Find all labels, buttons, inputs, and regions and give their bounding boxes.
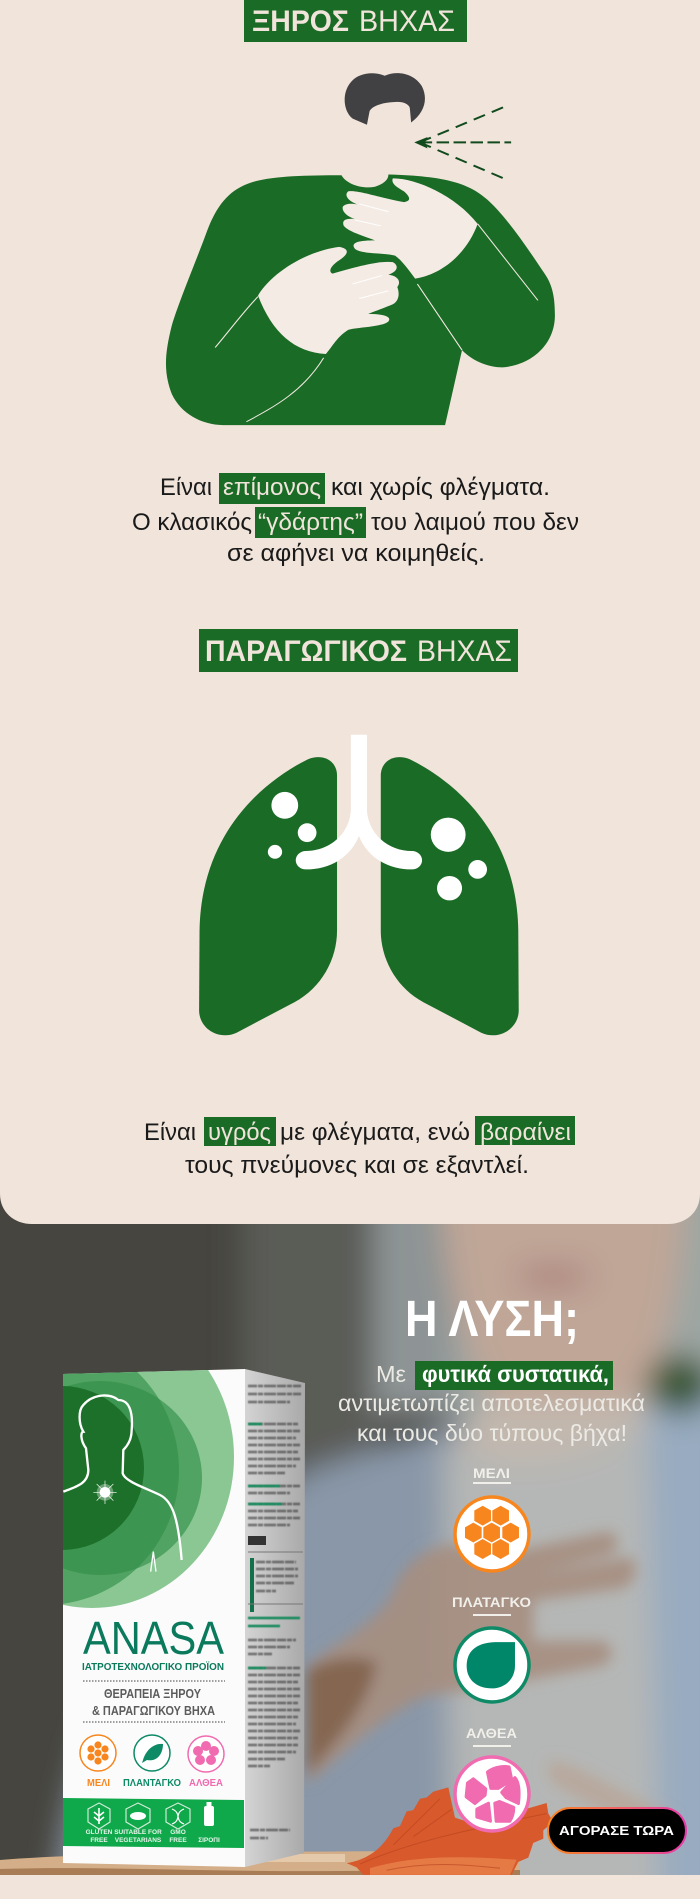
box ingredient labels (87, 1778, 223, 1789)
heading: the solution: Η ΛΥΣΗ; (405, 1290, 579, 1347)
text block: solution description: και τους δύο τύπους βήχα! (357, 1420, 627, 1446)
text block: dry cough description: “γδάρτης” (258, 509, 363, 536)
text block: productive cough description: με φλέγματα, ενώ (280, 1119, 470, 1146)
green band with badges: VEGETARIANS (115, 1837, 162, 1844)
heading: dry cough: ΒΗΧΑΣ (359, 5, 455, 38)
wood table (0, 1851, 520, 1875)
text block: solution description: αντιμετωπίζει αποτελεσματικά (338, 1390, 645, 1416)
mucus dots (268, 792, 487, 900)
text block: dry cough description: Είναι (160, 474, 212, 501)
text block: dry cough description: επίμονος (223, 474, 321, 501)
heading: productive cough: ΠΑΡΑΓΩΓΙΚΟΣ (205, 635, 407, 668)
box ingredient labels: ΜΕΛΙ (87, 1778, 110, 1789)
product claim: ΘΕΡΑΠΕΙΑ ΞΗΡΟΥ (104, 1686, 201, 1701)
main cream panel with rounded bottom corners (0, 0, 700, 1224)
text block: productive cough description: βαραίνει (480, 1119, 571, 1146)
torso (166, 175, 555, 425)
left lung (199, 757, 337, 1035)
green band with badges: GMO (170, 1829, 186, 1836)
heading: dry cough (244, 0, 467, 42)
text block: dry cough description: του λαιμού που δεν (371, 509, 579, 536)
lower hand (258, 247, 399, 354)
green overlapping circles (63, 1370, 234, 1608)
text block: solution description (338, 1361, 645, 1446)
arrow head (414, 137, 428, 148)
person outline (63, 1395, 182, 1572)
product claim: & ΠΑΡΑΓΩΓΙΚΟΥ ΒΗΧΑ (92, 1703, 216, 1718)
product type: ΙΑΤΡΟΤΕΧΝΟΛΟΓΙΚΟ ΠΡΟΪΟΝ (82, 1660, 224, 1673)
illustration: person coughing holding chest (166, 73, 555, 425)
right lung (381, 757, 519, 1035)
product claim (92, 1686, 216, 1718)
heading: productive cough: ΒΗΧΑΣ (417, 635, 512, 668)
trachea and bronchi (296, 735, 422, 869)
box ingredient icons (80, 1735, 224, 1772)
heading: productive cough (199, 629, 518, 672)
green band with badges: ΣΙΡΟΠΙ (198, 1837, 220, 1844)
ingredient: plantain: ΠΛΑΤΑΓΚΟ (452, 1594, 531, 1610)
green band with badges: SUITABLE FOR (114, 1829, 162, 1836)
cough arrows (420, 107, 511, 178)
text block: solution description: φυτικά συστατικά, (422, 1361, 609, 1387)
text block: dry cough description: και χωρίς φλέγματα. (331, 474, 550, 501)
upper hand (343, 178, 478, 279)
green band with badges (63, 1798, 244, 1848)
text block: productive cough description: Είναι (144, 1119, 196, 1146)
green band with badges: GLUTEN (86, 1829, 113, 1836)
box front (63, 1369, 245, 1867)
ingredient: althea (455, 1725, 529, 1831)
ingredient: plantain (452, 1594, 531, 1702)
brand name: ANASA (83, 1612, 224, 1664)
illustration: lungs with mucus (199, 735, 519, 1035)
ingredient: honey: ΜΕΛΙ (473, 1465, 510, 1481)
leaf decoration (347, 1787, 553, 1875)
box ingredient labels: ΑΛΘΕΑ (189, 1778, 223, 1789)
product box: ANASA (63, 1369, 305, 1867)
box side panel (245, 1369, 305, 1867)
text block: productive cough description: υγρός (208, 1119, 271, 1146)
text block: productive cough description (144, 1116, 575, 1179)
green band with badges: FREE (169, 1837, 187, 1844)
text block: productive cough description: τους πνεύμονες και σε εξαντλεί. (185, 1152, 529, 1179)
photo section: blurred person background (0, 1178, 700, 1899)
button: buy now (548, 1808, 686, 1853)
button: buy now: ΑΓΟΡΑΣΕ ΤΩΡΑ (559, 1823, 675, 1838)
sleeve and finger lines (215, 204, 538, 422)
green band with badges: FREE (90, 1837, 108, 1844)
heading: dry cough: ΞΗΡΟΣ (252, 5, 349, 38)
ingredient: althea: ΑΛΘΕΑ (466, 1725, 517, 1741)
hair (345, 73, 425, 125)
ingredient: honey (455, 1465, 529, 1571)
text block: dry cough description: σε αφήνει να κοιμηθείς. (227, 540, 485, 567)
text block: solution description: Με (376, 1361, 406, 1387)
box ingredient labels: ΠΛΑΝΤΑΓΚΟ (123, 1778, 181, 1789)
text block: dry cough description: Ο κλασικός (132, 509, 252, 536)
text block: dry cough description (132, 473, 579, 567)
